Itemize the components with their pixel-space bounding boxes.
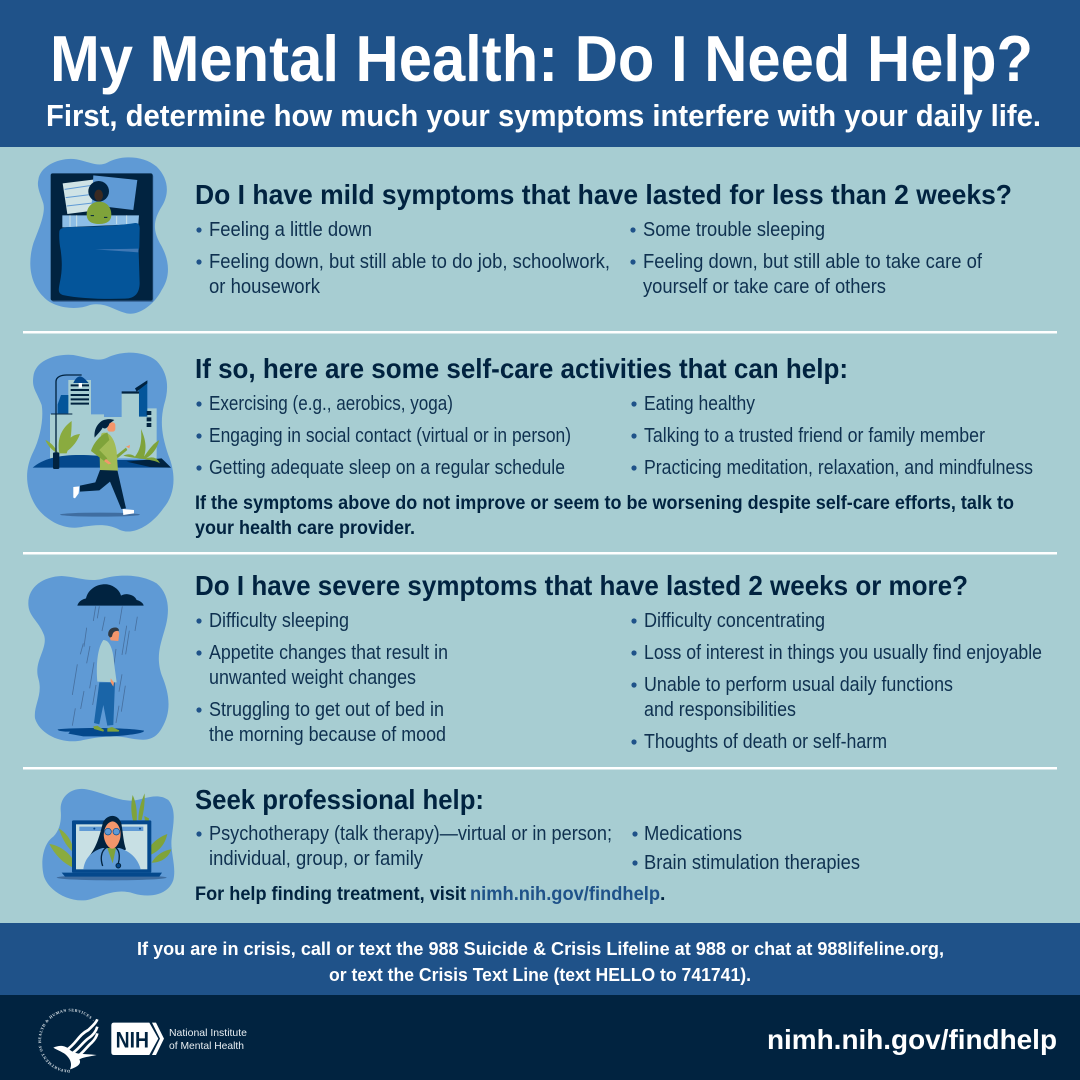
list: self-care: Practicing meditation, relaxation, and mindfulness [644,457,1033,479]
organisation name: National Institute [169,1027,247,1039]
list: professional help: Brain stimulation therapies [644,852,860,874]
note: talk to provider: your health care provider. [195,517,415,539]
list: professional help: Psychotherapy (talk therapy)—virtual or in person; [209,823,612,845]
organisation name: of Mental Health [169,1040,244,1052]
list: mild symptoms: yourself or take care of others [643,276,886,298]
logo: NIH [111,1023,164,1055]
list: self-care: Engaging in social contact (virtual or in person) [209,425,571,447]
list: severe symptoms: and responsibilities [644,699,796,721]
icon: man in the rain [28,576,169,741]
panel: mild symptoms [195,179,1012,298]
icon: person lying in bed [30,157,168,314]
subtitle: First, determine how much your symptoms interfere with your daily life. [46,98,1041,133]
list: severe symptoms: Appetite changes that result in [209,642,448,664]
panel: severe symptoms [195,570,1042,753]
list: severe symptoms [196,610,1042,753]
icon: doctor on laptop [42,789,174,900]
note: find treatment: nimh.nih.gov/findhelp [470,883,660,905]
heading: Seek professional help: [195,784,484,815]
panel: seek professional help [195,784,860,905]
list: mild symptoms: Some trouble sleeping [643,219,825,241]
note: find treatment: . [660,883,665,905]
list: severe symptoms: Difficulty sleeping [209,610,349,632]
note: find treatment: For help finding treatment, visit [195,883,466,905]
list: severe symptoms: Thoughts of death or self-harm [644,731,887,753]
heading: Do I have mild symptoms that have lasted for less than 2 weeks? [195,179,1012,210]
list: severe symptoms: the morning because of mood [209,724,446,746]
organisation name [169,1027,247,1052]
list: professional help: Medications [644,823,742,845]
list: severe symptoms: Struggling to get out of bed in [209,699,444,721]
list: self-care [196,393,1033,479]
note: find treatment [195,883,665,905]
note: talk to provider: If the symptoms above do not improve or seem to be worsening despite self-care efforts, talk to [195,492,1014,514]
heading: If so, here are some self-care activities that can help: [195,353,848,384]
logo: HHS eagle seal [38,1008,99,1073]
list: mild symptoms: or housework [209,276,321,298]
list: mild symptoms [196,219,982,298]
list: self-care: Exercising (e.g., aerobics, yoga) [209,393,453,415]
list: mild symptoms: Feeling down, but still able to take care of [643,251,982,273]
list: mild symptoms: Feeling a little down [209,219,372,241]
list: severe symptoms: Difficulty concentrating [644,610,825,632]
header banner [0,0,1080,147]
list: self-care: Getting adequate sleep on a regular schedule [209,457,565,479]
list: self-care: Eating healthy [644,393,755,415]
list: professional help [196,823,860,874]
heading: Do I have severe symptoms that have lasted 2 weeks or more? [195,570,968,601]
list: self-care: Talking to a trusted friend or family member [644,425,985,447]
list: mild symptoms: Feeling down, but still able to do job, schoolwork, [209,251,610,273]
list: professional help: individual, group, or family [209,848,423,870]
crisis banner: or text the Crisis Text Line (text HELLO to 741741). [329,964,751,985]
icon: woman jogging in city [27,353,174,532]
logo: NIH: NIH [116,1027,149,1052]
panel: self-care activities [195,353,1033,539]
list: severe symptoms: unwanted weight changes [209,667,416,689]
crisis banner: If you are in crisis, call or text the 988 Suicide & Crisis Lifeline at 988 or chat at 988lifeline.org, [137,938,944,959]
crisis banner [0,923,1080,995]
note: talk to provider [195,492,1014,539]
footer url: nimh.nih.gov/findhelp [767,1024,1057,1055]
list: severe symptoms: Unable to perform usual daily functions [644,674,953,696]
footer [0,995,1080,1080]
logo: HHS eagle seal: DEPARTMENT OF HEALTH & HUMAN SERVICES · USA [38,1008,94,1073]
